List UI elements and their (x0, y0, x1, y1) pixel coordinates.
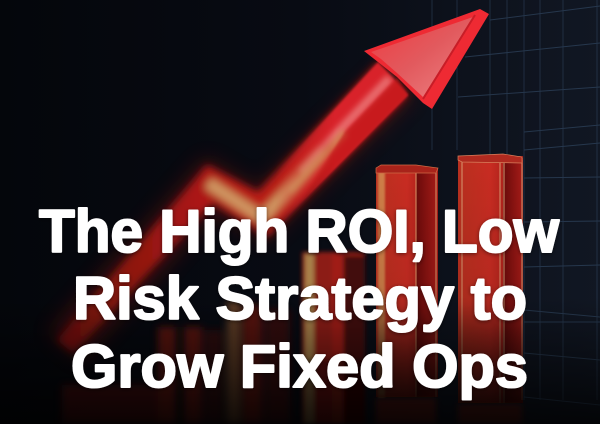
arrow head (364, 9, 489, 109)
title line 1: The High ROI, Low (39, 198, 559, 265)
title line 2: Risk Strategy to (73, 265, 527, 332)
blurred low bars on the left (62, 300, 290, 424)
title line 3: Grow Fixed Ops (71, 333, 528, 400)
title (39, 198, 559, 400)
arrow blurred shaft, lower section (57, 62, 408, 353)
bar: tallest (458, 154, 523, 403)
arrow glow (65, 80, 400, 347)
background perspective grid (432, 0, 600, 405)
bar reflections on the floor (376, 398, 522, 424)
rising red arrow (57, 9, 489, 353)
bar: medium height (376, 165, 438, 397)
arrow sharp shaft (280, 61, 410, 220)
blurred mid bar (302, 252, 365, 424)
